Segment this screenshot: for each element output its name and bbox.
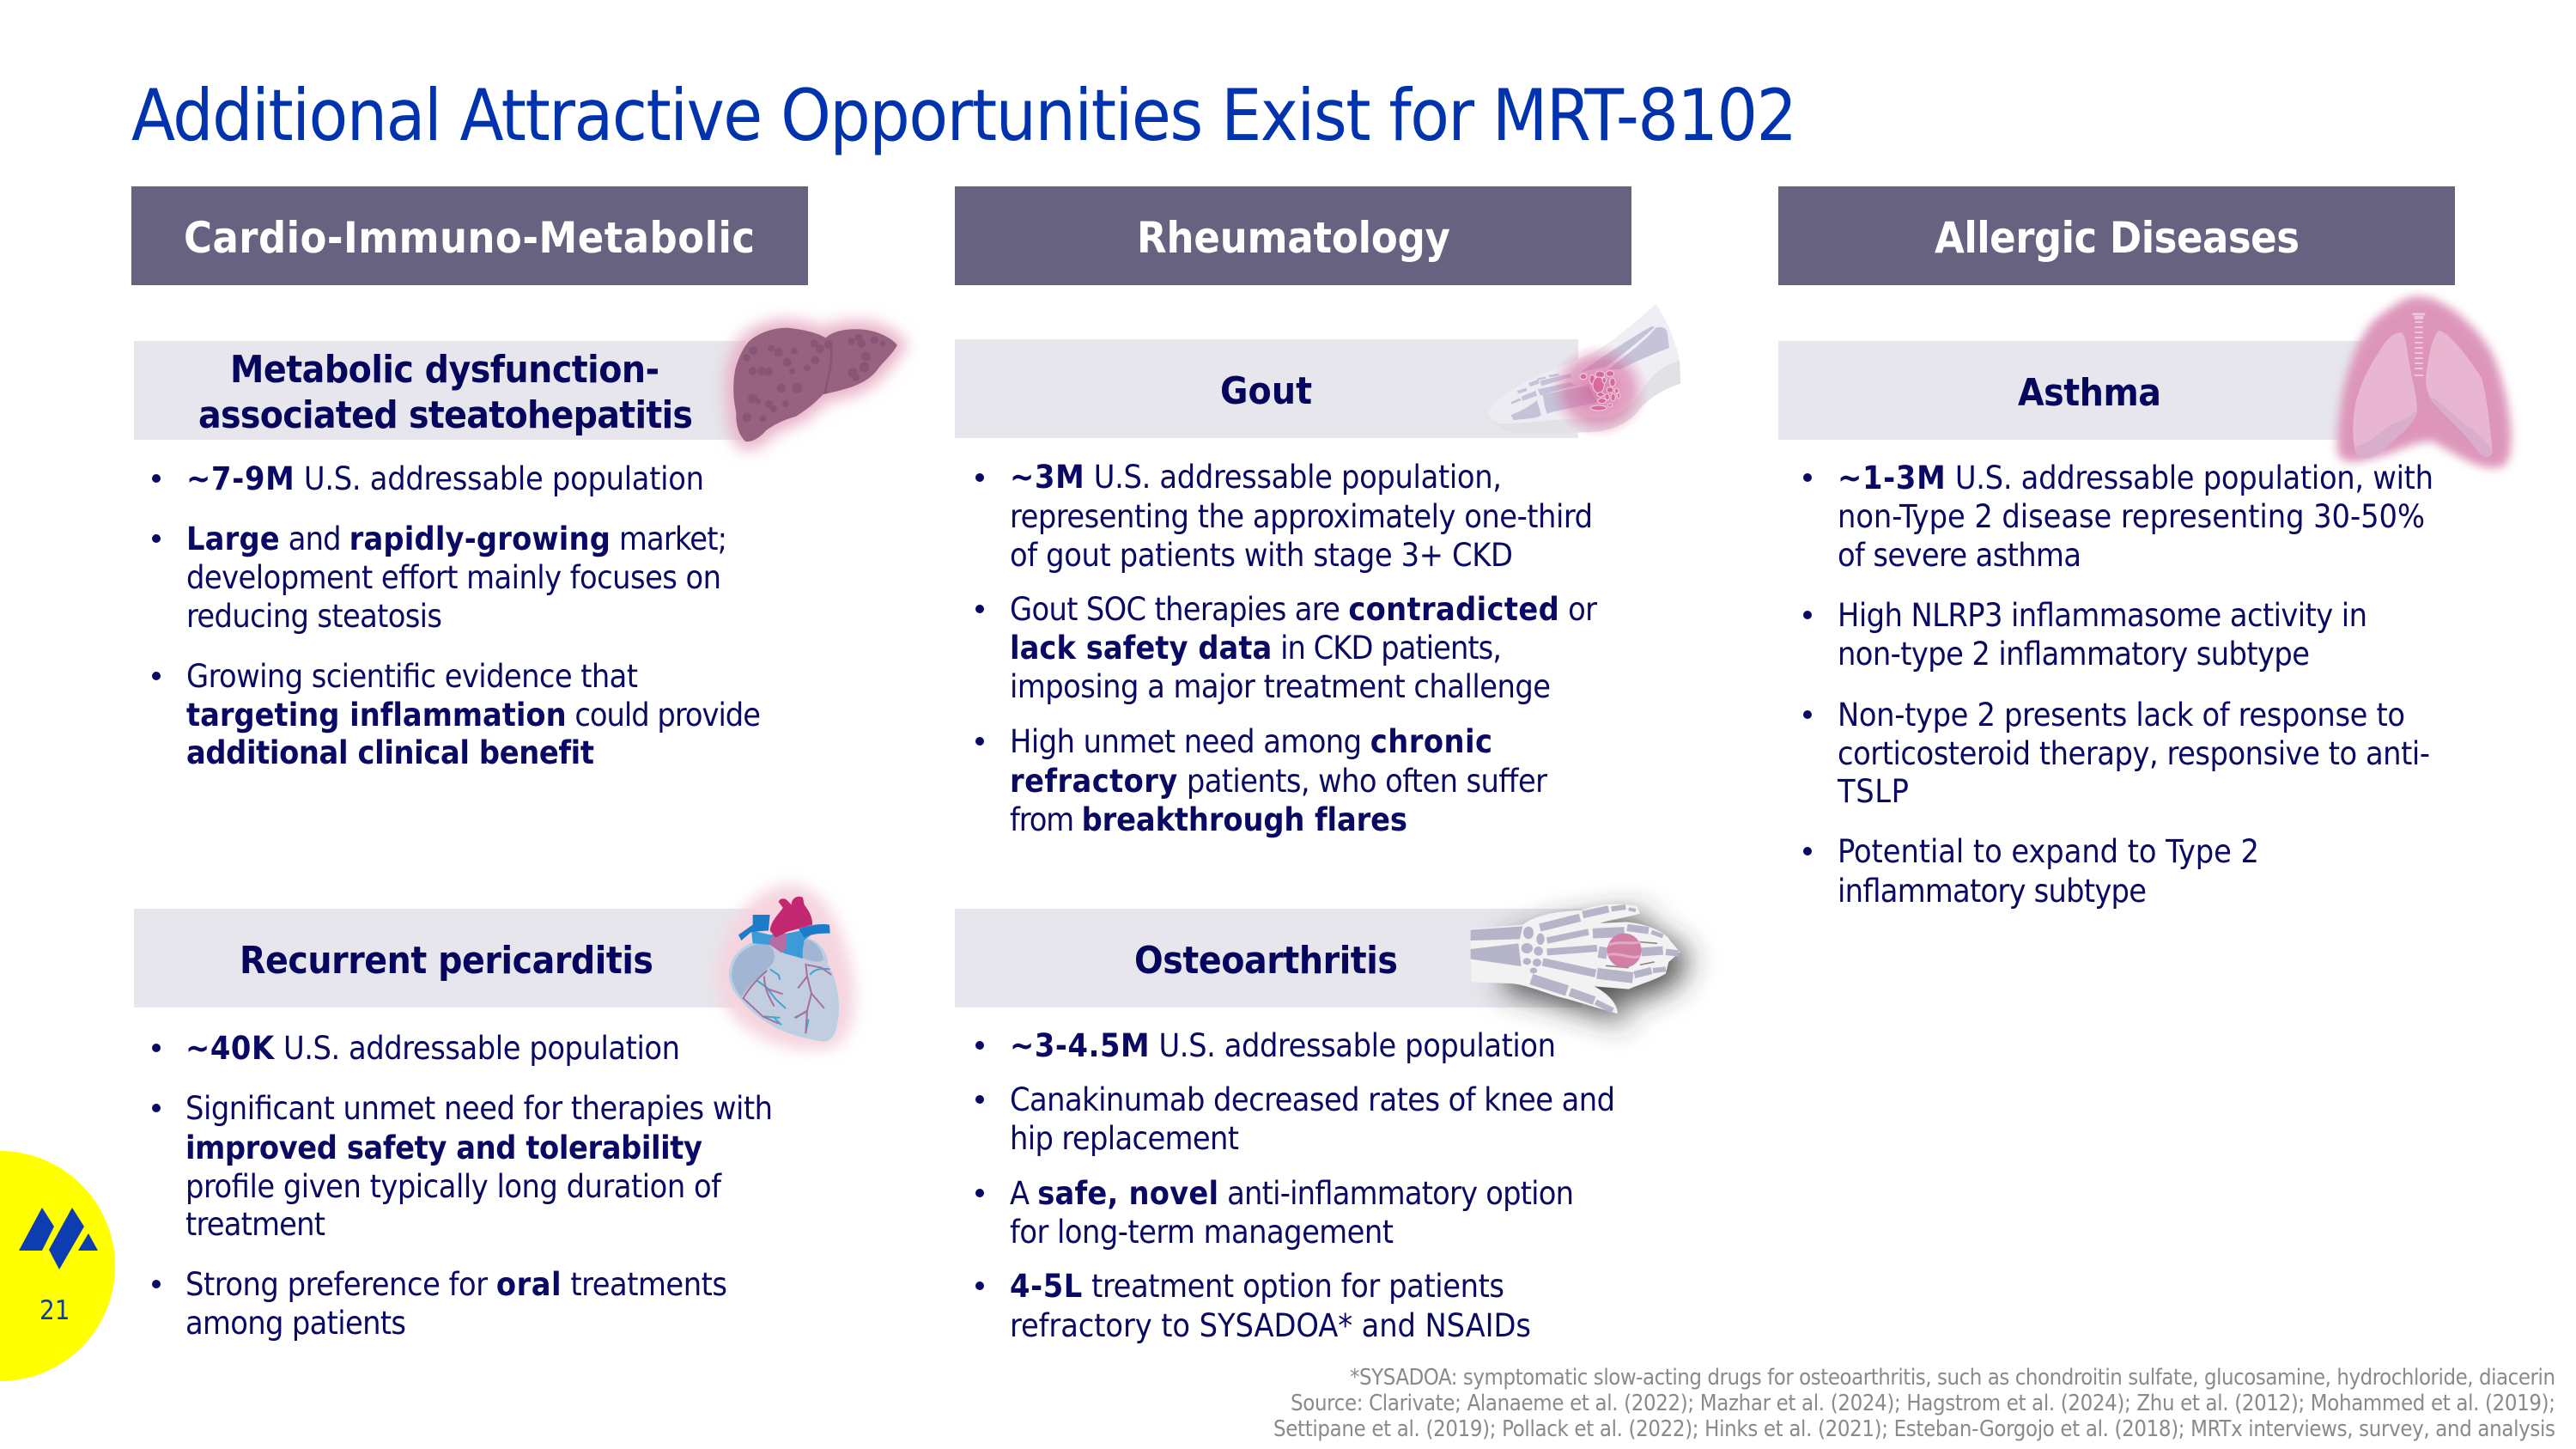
icon: hand skeleton	[1471, 904, 1692, 1024]
text block: Osteoarthritis bullets: 4-5L treatment option for patients	[1010, 1267, 1504, 1305]
text block: Gout bullets: from breakthrough flares	[1010, 801, 1408, 838]
text block: Recurrent pericarditis bullets	[152, 1029, 773, 1342]
text block: Osteoarthritis bullets: ~3-4.5M U.S. addressable population	[1010, 1026, 1556, 1064]
icon: liver	[733, 328, 897, 441]
text block: Asthma bullets	[1803, 459, 2433, 910]
panel heading: Asthma	[1778, 341, 2385, 440]
text block: Gout bullets: imposing a major treatment challenge	[1010, 667, 1551, 705]
icon: heart	[717, 885, 854, 1050]
footnote and sources: *SYSADOA: symptomatic slow-acting drugs for osteoarthritis, such as chondroitin sulfate, glucosamine, hydrochloride, diacerin	[1350, 1365, 2555, 1391]
title: Additional Attractive Opportunities Exist for MRT-8102	[131, 74, 1797, 157]
text block: Osteoarthritis bullets	[975, 1026, 1615, 1344]
column header: Cardio-Immuno-Metabolic: Cardio-Immuno-Metabolic	[184, 213, 755, 263]
text block: Gout bullets	[975, 458, 1597, 838]
text block: Osteoarthritis bullets: for long-term management	[1010, 1213, 1394, 1251]
text block: Osteoarthritis bullets: Canakinumab decreased rates of knee and	[1010, 1081, 1615, 1118]
panel heading: Metabolic dysfunction-associated steatohepatitis	[134, 341, 745, 440]
text block: MASH bullets: reducing steatosis	[186, 597, 442, 635]
text block: Asthma bullets: non-type 2 inflammatory subtype	[1838, 635, 2310, 673]
text block: Recurrent pericarditis bullets: Significant unmet need for therapies with	[185, 1089, 773, 1127]
panel heading: Asthma: Asthma	[2018, 371, 2161, 415]
text block: Recurrent pericarditis bullets: ~40K U.S. addressable population	[185, 1029, 680, 1067]
text block: MASH bullets: ~7-9M U.S. addressable population	[186, 460, 704, 497]
text block: Asthma bullets: ~1-3M U.S. addressable population, with	[1838, 459, 2433, 496]
text block: MASH bullets: development effort mainly focuses on	[186, 558, 721, 596]
column header: Rheumatology	[955, 186, 1631, 285]
text block: Asthma bullets: High NLRP3 inflammasome activity in	[1838, 596, 2367, 634]
text block: Osteoarthritis bullets: refractory to SYSADOA* and NSAIDs	[1010, 1306, 1531, 1344]
panel heading: Metabolic dysfunction-associated steatohepatitis: Metabolic dysfunction-	[230, 348, 659, 392]
text block: Recurrent pericarditis bullets: Strong preference for oral treatments	[185, 1265, 727, 1303]
text block: Asthma bullets: TSLP	[1837, 772, 1909, 810]
text block: Asthma bullets: Potential to expand to Type 2	[1838, 832, 2259, 870]
text block: MASH bullets: Large and rapidly-growing market;	[186, 520, 727, 557]
text block: Asthma bullets: inflammatory subtype	[1838, 872, 2147, 910]
text block: Asthma bullets: Non-type 2 presents lack of response to	[1838, 696, 2405, 734]
text block: Gout bullets: representing the approximately one-third	[1010, 497, 1593, 535]
text block: Gout bullets: High unmet need among chronic	[1010, 722, 1493, 760]
text block: Recurrent pericarditis bullets: profile given typically long duration of	[185, 1167, 722, 1205]
panel heading: Recurrent pericarditis	[134, 909, 756, 1008]
panel heading: Gout	[955, 339, 1578, 438]
text block: Recurrent pericarditis bullets: among patients	[185, 1304, 406, 1342]
text block: Gout bullets: refractory patients, who often suffer	[1010, 762, 1547, 800]
icon: foot with gout	[1488, 304, 1680, 438]
text block: MASH bullets: additional clinical benefit	[186, 734, 595, 771]
panel heading: Osteoarthritis: Osteoarthritis	[1134, 939, 1398, 983]
text block: Recurrent pericarditis bullets: improved safety and tolerability	[185, 1129, 703, 1166]
panel heading: Osteoarthritis	[955, 909, 1582, 1008]
panel heading: Recurrent pericarditis: Recurrent pericarditis	[240, 939, 653, 983]
text block: Recurrent pericarditis bullets: treatment	[185, 1205, 325, 1243]
text block: Gout bullets: lack safety data in CKD patients,	[1010, 629, 1502, 667]
text block: Gout bullets: Gout SOC therapies are contradicted or	[1010, 590, 1597, 628]
text block: MASH bullets: targeting inflammation could provide	[186, 696, 761, 734]
text block: Osteoarthritis bullets: A safe, novel anti-inflammatory option	[1010, 1174, 1574, 1212]
text block: MASH bullets: Growing scientific evidence that	[186, 657, 638, 695]
logo badge with page number: 21	[39, 1295, 70, 1326]
column header: Allergic Diseases	[1778, 186, 2455, 285]
text block: MASH bullets	[152, 460, 761, 771]
text block: Osteoarthritis bullets: hip replacement	[1010, 1119, 1239, 1157]
icon: lungs	[2337, 296, 2512, 468]
text block: Gout bullets: of gout patients with stage 3+ CKD	[1010, 536, 1513, 574]
text block: Asthma bullets: corticosteroid therapy, responsive to anti-	[1838, 734, 2430, 772]
footnote and sources: Settipane et al. (2019); Pollack et al. (2022); Hinks et al. (2021); Esteban-Gorgojo et al. (2018); MRTx interviews, survey, and analysis	[1273, 1416, 2555, 1442]
footnote and sources: Source: Clarivate; Alanaeme et al. (2022); Mazhar et al. (2024); Hagstrom et al. (2024); Zhu et al. (2012); Mohammed et al. (2019);	[1291, 1391, 2555, 1416]
panel heading: Metabolic dysfunction-associated steatohepatitis: associated steatohepatitis	[198, 393, 693, 437]
text block: Asthma bullets: of severe asthma	[1838, 536, 2081, 574]
column header: Rheumatology: Rheumatology	[1137, 213, 1450, 263]
text block: Gout bullets: ~3M U.S. addressable population,	[1010, 458, 1502, 496]
panel heading: Gout: Gout	[1220, 369, 1312, 413]
logo badge with page number	[0, 1151, 115, 1381]
footnote and sources	[1273, 1365, 2555, 1442]
column header: Allergic Diseases: Allergic Diseases	[1935, 213, 2300, 263]
text block: Asthma bullets: non-Type 2 disease representing 30-50%	[1838, 497, 2425, 535]
column header: Cardio-Immuno-Metabolic	[131, 186, 808, 285]
